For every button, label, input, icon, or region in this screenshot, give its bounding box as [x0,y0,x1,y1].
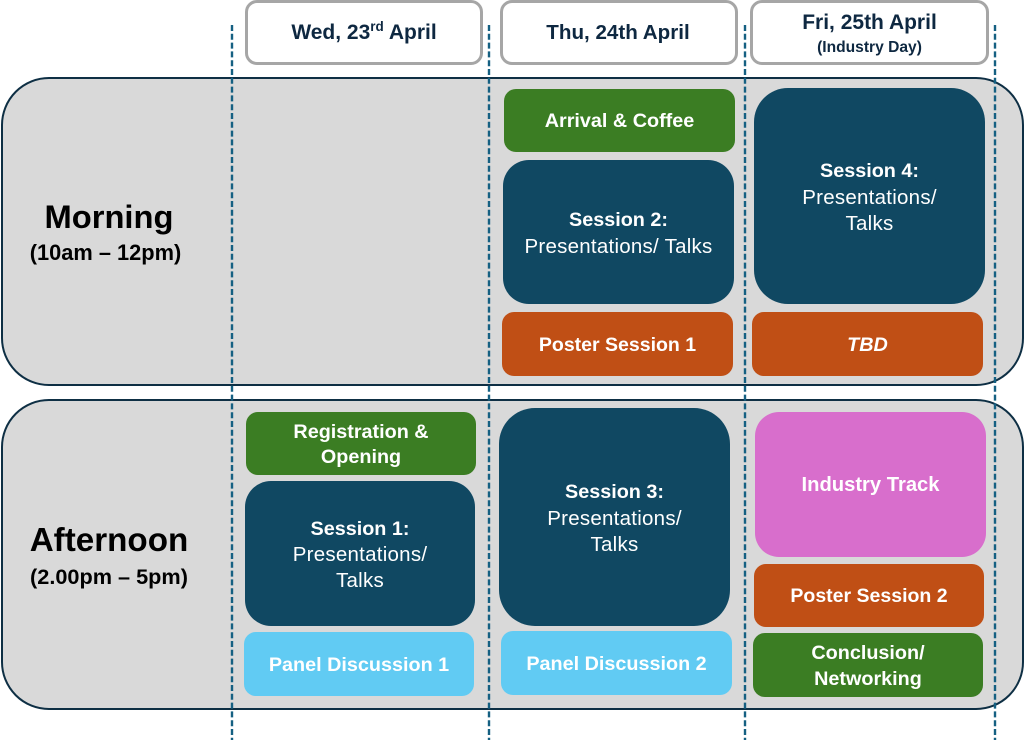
block: Registration & Opening: Opening [321,446,401,468]
block: Session 2: Session 2: [569,209,668,231]
label: afternoon: (2.00pm – 5pm) [30,564,188,589]
block: Session 1: Presentations/ [293,543,427,566]
label: afternoon: Afternoon [30,522,188,559]
panel: morning band [1,77,1024,386]
block: Poster Session 1: Poster Session 1 [539,334,696,356]
heading: Thu column: Thu, 24th April [546,20,690,44]
block: Session 2 [503,160,734,304]
block: Conclusion / Networking: Conclusion/ [811,642,925,664]
block: TBD: TBD [847,334,888,356]
block: Industry Track: Industry Track [802,474,940,496]
block: Session 3: Session 3: [565,481,664,503]
block: Poster Session 1 [502,312,733,376]
block: Registration & Opening [246,412,476,475]
block: Arrival & Coffee: Arrival & Coffee [545,110,694,132]
block: Session 2: Presentations/ Talks [524,235,713,258]
block: Session 3: Talks [591,533,638,556]
block: Arrival & Coffee [504,89,735,152]
block: Panel Discussion 2 [501,631,732,695]
block: Industry Track [755,412,986,557]
label: morning: Morning [45,198,173,235]
block: Panel Discussion 1 [244,632,474,696]
label: morning: (10am – 12pm) [30,240,181,265]
heading: Wed column [245,0,483,65]
block: Panel Discussion 2: Panel Discussion 2 [526,653,707,675]
block: Session 1: Talks [336,569,384,592]
block: Session 1 [245,481,475,626]
block: Poster Session 2: Poster Session 2 [790,585,948,607]
block: Conclusion / Networking [753,633,983,697]
heading: Fri column: (Industry Day) [817,39,922,56]
block: Session 4 [754,88,985,304]
block: Session 4: Presentations/ [802,186,937,209]
label: morning [30,198,181,265]
block: Registration & Opening: Registration & [293,421,429,443]
heading: Wed column: Wed, 23rd April [291,18,437,44]
heading: Thu column [500,0,738,65]
block: Session 4: Session 4: [820,160,919,182]
block: Session 4: Talks [846,212,893,235]
block: Session 3 [499,408,730,626]
label: afternoon [30,522,188,589]
block: Poster Session 2 [754,564,984,627]
heading: Fri column: Fri, 25th April [802,11,937,34]
block: Conclusion / Networking: Networking [814,668,922,690]
block: Panel Discussion 1: Panel Discussion 1 [269,654,449,676]
block: Session 1: Session 1: [311,518,409,540]
panel: afternoon band [1,399,1024,710]
heading: Fri column [750,0,989,65]
block: Session 3: Presentations/ [547,507,682,530]
block: TBD [752,312,983,376]
